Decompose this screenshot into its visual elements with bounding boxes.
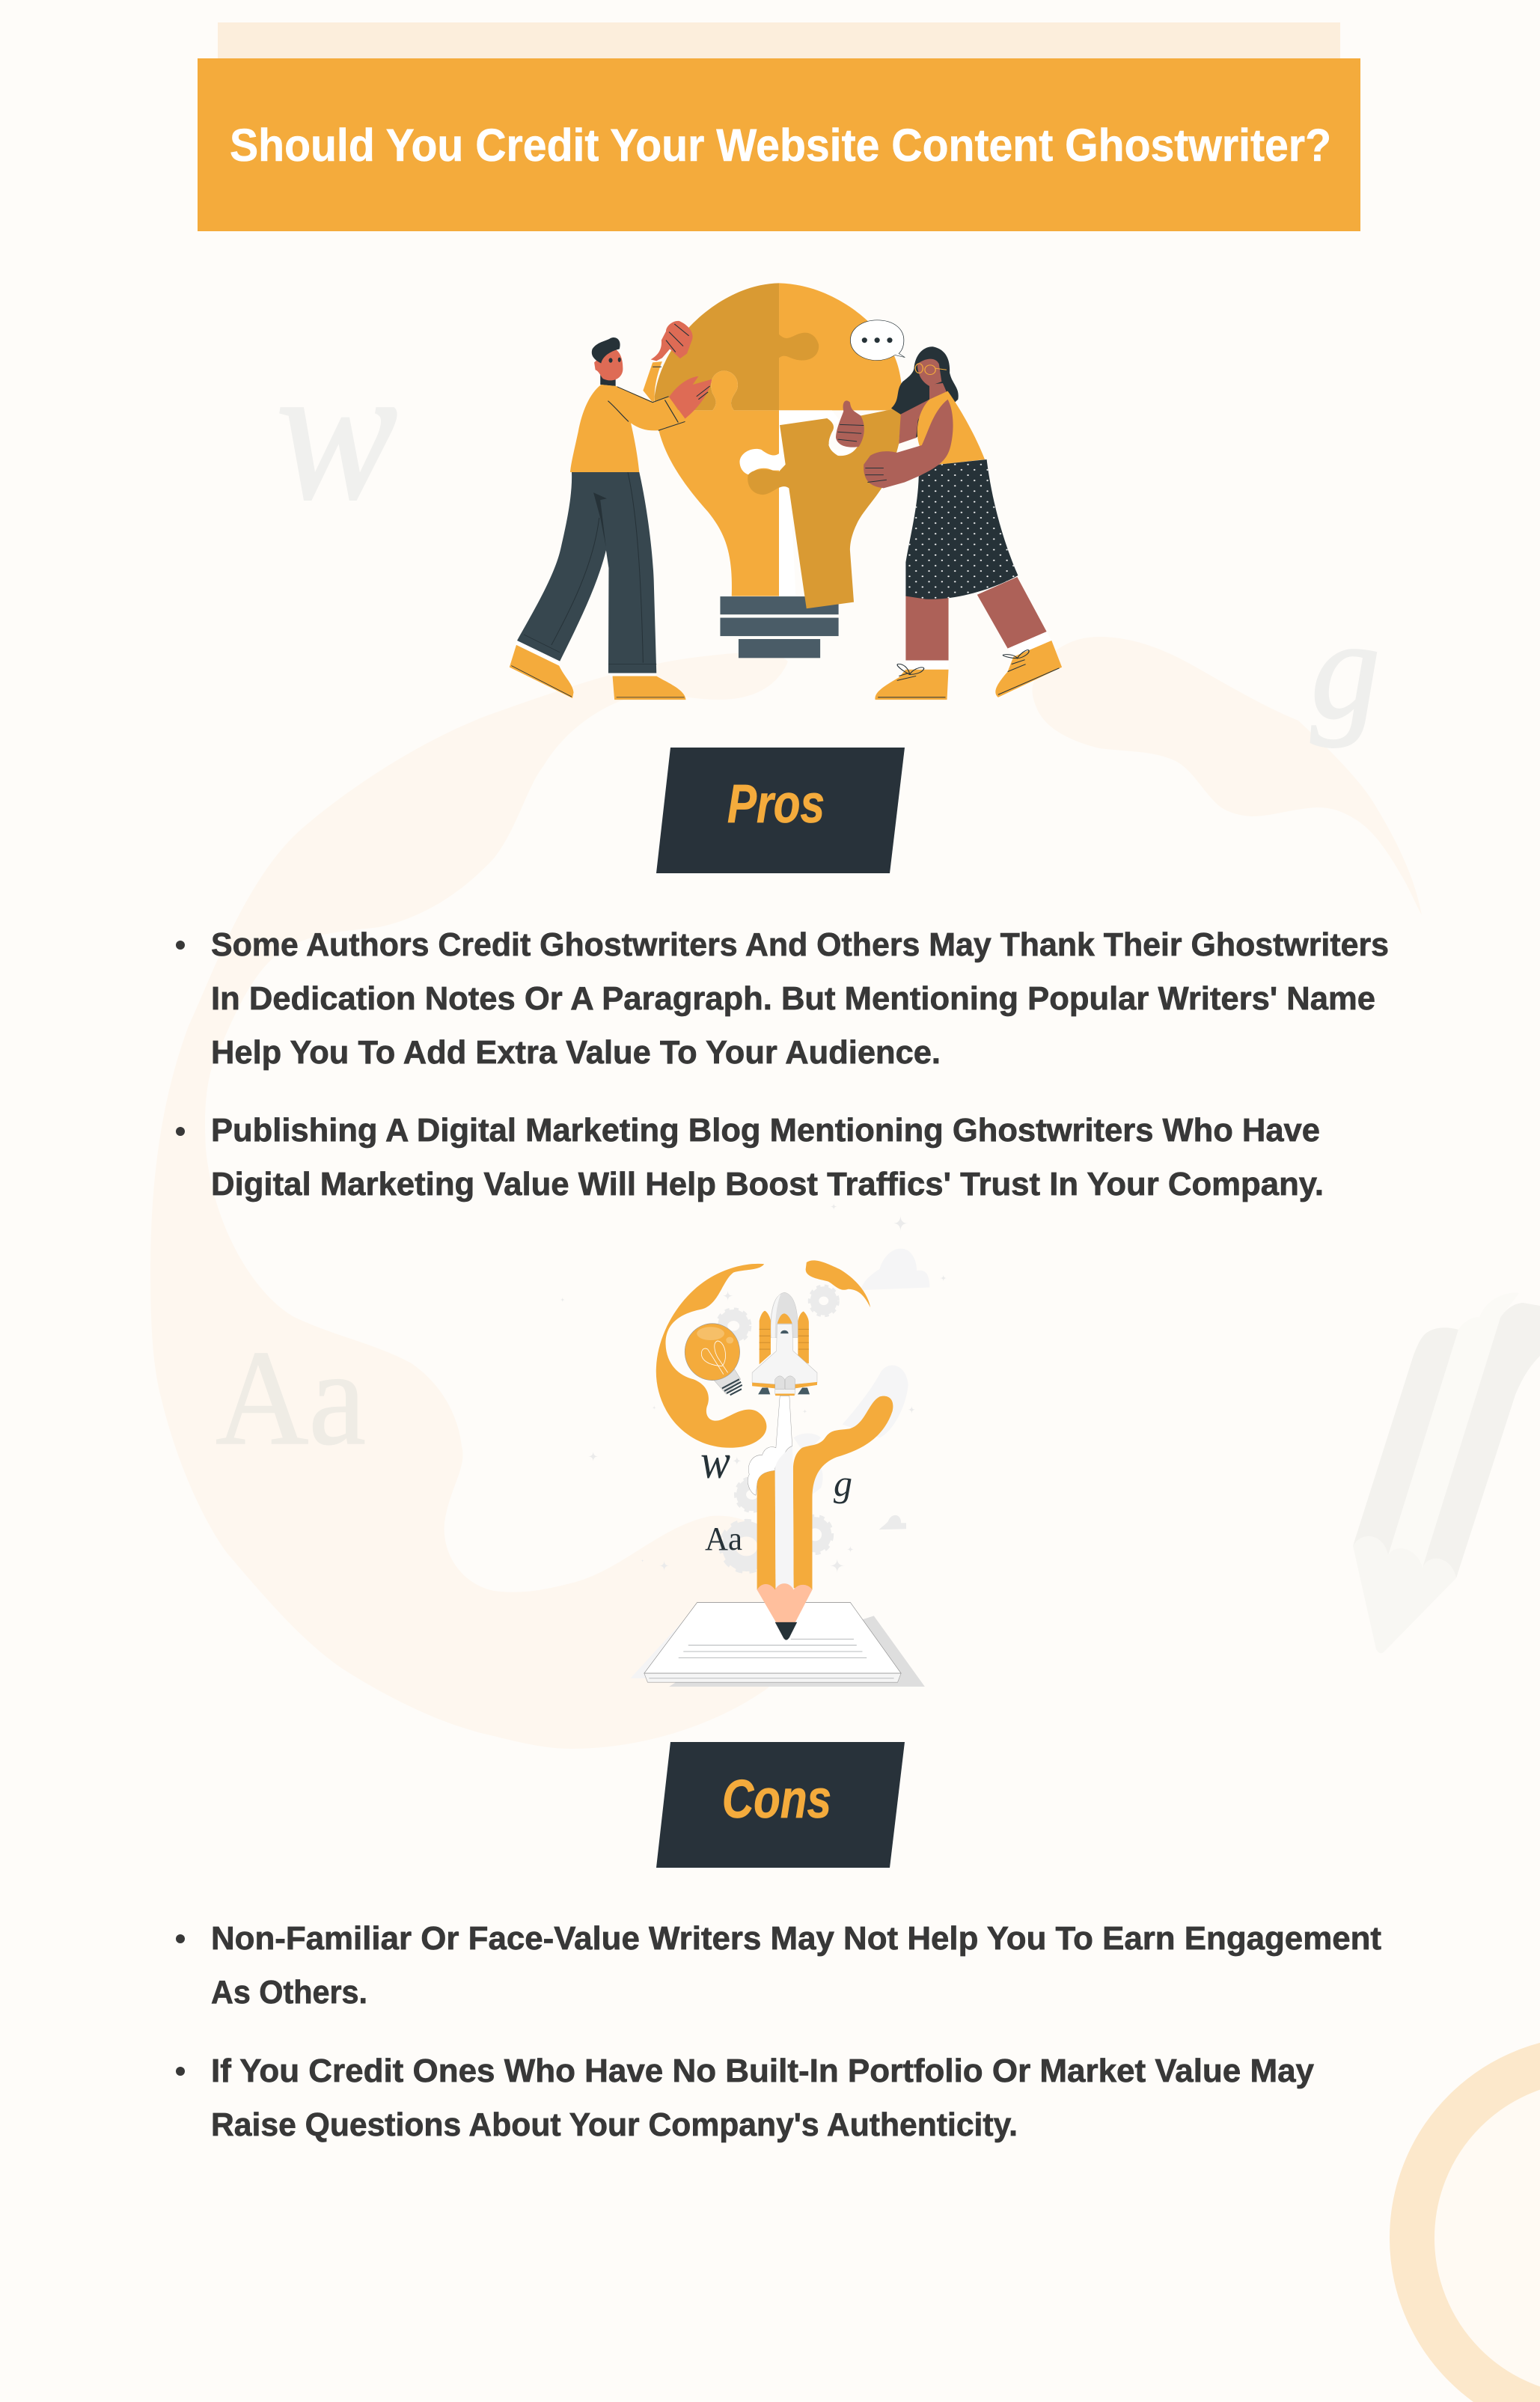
illustration letters: Aa: Aa: [705, 1521, 742, 1557]
con 1: [176, 1920, 1381, 2011]
con 2: If You Credit Ones Who Have No Built-In Portfolio Or Market Value May: [211, 2053, 1315, 2089]
pencil: [757, 1396, 893, 1640]
Cons heading: Cons: [722, 1770, 831, 1830]
illustration: two people assembling a lightbulb puzzle: [510, 283, 1062, 700]
polka-dot skirt: [905, 459, 1018, 599]
rocket exhaust trail: [748, 1396, 792, 1495]
background: right peach blob: [1032, 637, 1422, 915]
bulb base: [720, 596, 839, 658]
bulb puzzle pieces: [655, 283, 902, 658]
woman's shoes: [875, 641, 1062, 700]
background letter: w: w: [276, 325, 398, 540]
con 2: [176, 2053, 1315, 2143]
gears: [717, 1286, 838, 1571]
illustration letter: g: g: [834, 1462, 852, 1504]
background: faint pencil: [1353, 1292, 1540, 1653]
Cons badge: [656, 1742, 905, 1868]
pro 1: In Dedication Notes Or A Paragraph. But Mentioning Popular Writers' Name: [211, 980, 1375, 1017]
background: corner ring: [1412, 2059, 1540, 2402]
illustration letter: w: w: [700, 1434, 730, 1489]
woman: [836, 346, 1062, 700]
background: peach swoosh: [150, 653, 801, 1749]
sparkles: [560, 1203, 947, 1573]
con 1: Non-Familiar Or Face-Value Writers May Not Help You To Earn Engagement: [211, 1920, 1381, 1957]
orange swirl: [656, 1260, 870, 1448]
man's shoes: [510, 645, 686, 700]
background letter: g: g: [1311, 591, 1380, 748]
pro 2: Digital Marketing Value Will Help Boost Traffics' Trust In Your Company.: [211, 1166, 1324, 1202]
pro 2: Publishing A Digital Marketing Blog Mentioning Ghostwriters Who Have: [211, 1112, 1320, 1149]
pro 1: Some Authors Credit Ghostwriters And Others May Thank Their Ghostwriters: [211, 926, 1389, 963]
pro 1: Help You To Add Extra Value To Your Audience.: [211, 1034, 941, 1071]
Pros heading: Pros: [727, 774, 825, 834]
illustration: rocket launching from a pencil: [560, 1203, 947, 1687]
Pros badge: [656, 748, 905, 873]
space shuttle rocket: [752, 1292, 817, 1396]
title: Should You Credit Your Website Content Ghostwriter?: [230, 120, 1331, 171]
speech bubble: [850, 320, 905, 361]
small lightbulb: [685, 1324, 742, 1395]
header: back panel: [218, 22, 1340, 58]
man: [510, 321, 712, 700]
Cons list: [176, 1920, 1381, 2143]
pro 1: [176, 926, 1389, 1071]
header: title banner: [198, 58, 1360, 231]
paper stack: [630, 1602, 925, 1687]
con 2: Raise Questions About Your Company's Authenticity.: [211, 2106, 1018, 2143]
pro 2: [176, 1112, 1324, 1202]
clouds and smoke: [794, 1249, 929, 1529]
background letters: Aa: Aa: [216, 1323, 366, 1473]
con 1: As Others.: [211, 1974, 367, 2011]
Pros list: [176, 926, 1389, 1202]
